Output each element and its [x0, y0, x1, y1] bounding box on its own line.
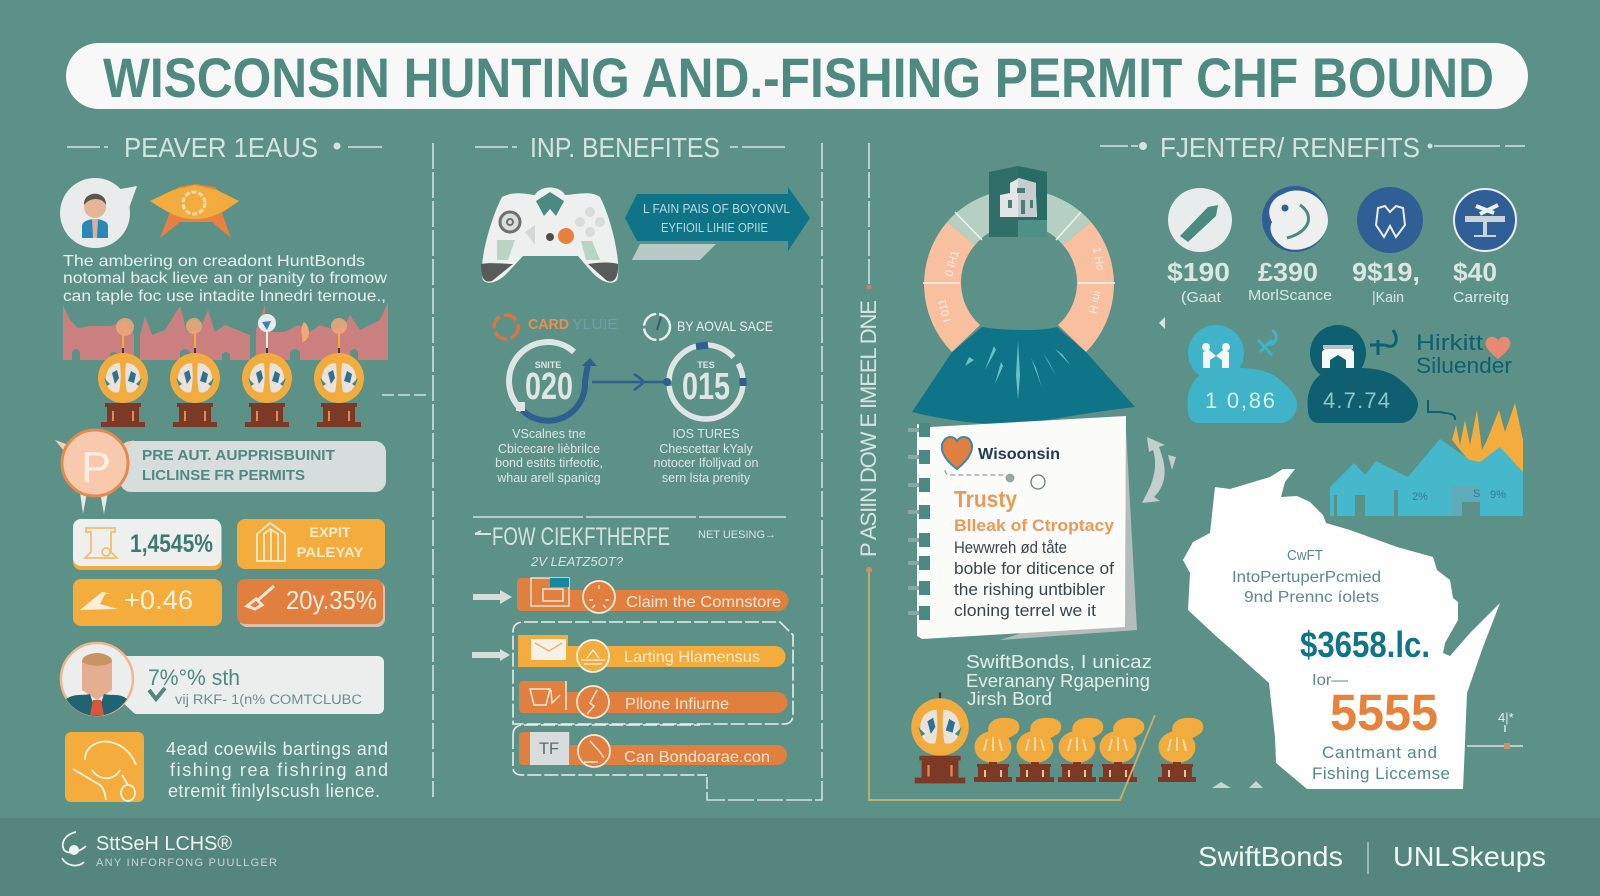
benefit: 9$19: [1352, 187, 1423, 306]
donut chart with mountain: [912, 189, 1135, 425]
heading: how to: FOW CIEKFTHERFE: [492, 523, 670, 551]
map: Wisconsin: 9nd Prennc íolets: [1244, 589, 1379, 606]
arrow: gauge link: [592, 374, 665, 390]
step: larting: [518, 635, 786, 672]
map: Wisconsin: IntoPertuperPcmied: [1232, 569, 1381, 586]
arrow: step one: [473, 590, 512, 604]
small scale marker: 4|*: [1498, 710, 1514, 725]
footer brands: SwiftBonds: [1198, 841, 1343, 872]
stat card: +0.46: [73, 579, 222, 626]
heading: how to: NET UESING→: [698, 529, 776, 541]
benefit: 9$19: 9$19,: [1352, 257, 1420, 287]
notepad card: Hewwreh ød tåte: [954, 538, 1067, 557]
stat card: expit paleyay: [237, 519, 385, 569]
heading: left column: PEAVER 1EAUS: [124, 132, 318, 163]
arrow: step two: [472, 649, 510, 661]
step: plione: [519, 681, 788, 718]
text block: swiftbonds note: [966, 652, 1152, 709]
column dividers: [433, 143, 869, 800]
label: card value: [494, 315, 618, 339]
stat card: expit paleyay: PALEYAY: [296, 544, 364, 560]
label: hirkitt siluender: [1416, 330, 1512, 420]
map: Wisconsin: Fishing Liccemse: [1312, 764, 1450, 783]
stat card: +0.46: +0.46: [124, 585, 193, 615]
benefit: $190: [1167, 188, 1232, 306]
label: hirkitt siluender: Siluender: [1416, 353, 1512, 378]
stat blob: dark: [1308, 325, 1418, 423]
label: card value: YLUIE: [572, 316, 618, 333]
text block: swiftbonds note: Everanany Rgapening: [966, 671, 1150, 691]
benefit: $40: Carreitg: [1453, 290, 1509, 306]
text block: gauge 020: bond estits tirfeotic,: [495, 456, 603, 470]
footer logo: ANY INFORFONG PUULLGER: [96, 857, 277, 869]
arrow banner: EYFIOIL LIHIE OPIIE: [661, 220, 768, 235]
connector: [382, 394, 430, 396]
small ground marks: [1212, 781, 1263, 788]
stat card: expit paleyay: EXPIT: [310, 524, 351, 540]
map: Wisconsin: Cantmant and: [1322, 743, 1437, 762]
callout: person with stat: vij RKF- 1(n% COMTCLUBC: [175, 692, 362, 707]
map: Wisconsin: [1183, 469, 1500, 789]
notepad card: Trusty: [954, 486, 1017, 512]
map: Wisconsin: 5555: [1330, 684, 1438, 741]
text block: left note: 4ead coewils bartings and: [166, 739, 388, 759]
heading: left column: [67, 132, 382, 163]
map: Wisconsin: Ior—: [1312, 672, 1348, 689]
gauge: 015: [663, 345, 743, 419]
text block: swiftbonds note: SwiftBonds, I unicaz: [966, 652, 1152, 672]
stat card: 1,4545%: 1,4545%: [130, 530, 213, 558]
step: plione: Pllone Infiurne: [625, 696, 729, 713]
donut chart with mountain: 0 IH1: [943, 249, 962, 278]
benefit: 9$19: |Kain: [1372, 290, 1404, 306]
notepad card: the rishing untbibler: [954, 580, 1105, 599]
footer brands: UNLSkeups: [1393, 841, 1546, 872]
text block: gauge 015: notocer Ifolljvad on: [654, 456, 759, 470]
heading: middle column: INP. BENEFITES: [530, 132, 720, 163]
callout: license permits: LICLINSE FR PERMITS: [142, 468, 305, 484]
stat card: 1,4545%: [73, 519, 222, 570]
callout: person with stat: 7%°% sth: [148, 665, 240, 690]
gold timeline line: [866, 567, 1155, 800]
footer brands: [1198, 841, 1546, 874]
icon: rotate arrows: [1142, 437, 1176, 503]
step: claim: [517, 578, 788, 613]
map: Wisconsin: CwFT: [1287, 547, 1323, 564]
step: claim: Claim the Comnstore: [626, 594, 781, 611]
gauge: 015: 015: [682, 366, 730, 408]
small marker: [1159, 317, 1165, 329]
callout: license permits: P: [81, 443, 111, 492]
illustration: town skyline: [1330, 403, 1523, 516]
icon: orange animal square: [65, 732, 144, 802]
stat blob: dark: 4.7.74: [1323, 388, 1390, 413]
text block: swiftbonds note: Jirsh Bord: [967, 689, 1052, 709]
step: can bond: TF: [539, 739, 559, 758]
callout: license permits: PRE AUT. AUPPRISBUINIT: [142, 448, 335, 464]
benefit: £390: £390: [1258, 257, 1318, 287]
label: card value: CARD: [528, 316, 569, 333]
icon: person speech bubble: [60, 178, 137, 248]
heading: right column: [1100, 132, 1525, 163]
notepad card: [908, 416, 1137, 640]
gauge: 020: [509, 342, 597, 421]
label: by annual sace: BY AOVAL SACE: [677, 318, 773, 334]
text block: intro: notomal back lieve an or panity to fromow: [63, 270, 387, 287]
benefit: $40: [1453, 189, 1516, 306]
illustration: town skyline: 2%: [1412, 491, 1428, 503]
footer logo: [62, 832, 277, 869]
arrow banner: [625, 187, 810, 260]
dashed step frames: [513, 622, 793, 775]
map: Wisconsin: $3658.lc.: [1300, 624, 1430, 665]
label: by annual sace: [644, 314, 773, 340]
stat card: 20y.35%: [237, 579, 385, 627]
donut chart with mountain: ını H: [1086, 289, 1104, 315]
icon: orange badge: [150, 184, 239, 238]
heading: right column: FJENTER/ RENEFITS: [1160, 132, 1420, 163]
gauge: 020: SNITE: [535, 360, 561, 370]
step: can bond: [519, 732, 787, 767]
benefit: $190: (Gaat: [1181, 290, 1221, 306]
text block: left note: etremit finlyIscush lience.: [168, 781, 380, 801]
illustration: town skyline: 9%: [1490, 489, 1506, 501]
vertical label: P ASIIN DOW E IMEEL DNE: [856, 300, 881, 557]
text block: gauge 020: VScalnes tne: [512, 427, 586, 441]
stat card: 20y.35%: 20y.35%: [286, 585, 377, 615]
text block: left note: fishing rea fishring and: [170, 760, 388, 780]
icon: game controller: [481, 188, 618, 283]
benefit: £390: [1248, 186, 1332, 304]
text block: gauge 015: Chescettar kYaly: [659, 442, 754, 456]
arrow banner: L FAIN PAIS OF BOYONVL: [643, 201, 790, 216]
callout: person with stat: [61, 643, 384, 716]
benefit: $190: $190: [1167, 257, 1230, 287]
icon: house badge: [989, 166, 1047, 237]
notepad card: cloning terrel we it: [954, 601, 1096, 620]
text block: gauge 020: Cbicecare lièbrilce: [498, 442, 600, 456]
text block: gauge 020: [495, 427, 603, 485]
benefit: $40: $40: [1453, 257, 1497, 287]
text block: intro: [63, 253, 387, 305]
text block: intro: The ambering on creadont HuntBonds: [63, 253, 365, 270]
lamp row: [98, 348, 364, 427]
step: can bond: Can Bondoarae.con: [624, 749, 770, 766]
donut chart with mountain: 1 Ho: [1090, 246, 1106, 271]
footer logo: SttSeH LCHS®: [96, 833, 232, 855]
text block: left note: [166, 739, 388, 801]
gauge: 020: 020: [525, 366, 573, 408]
callout: license permits: [55, 430, 386, 514]
benefit: £390: MorlScance: [1248, 288, 1332, 304]
illustration: pink skyline: [63, 302, 388, 360]
text block: gauge 020: whau arell spanicg: [496, 471, 601, 485]
notepad card: Wisoonsin: [978, 446, 1060, 463]
illustration: town skyline: S: [1473, 488, 1480, 500]
donut chart with mountain: I 011: [936, 297, 954, 323]
step: larting: Larting Hlamensus: [624, 649, 760, 666]
gauge: 015: TES: [697, 360, 715, 370]
label: hirkitt siluender: Hirkitt: [1416, 330, 1483, 355]
lamp row: large and small: [911, 692, 1203, 783]
heading: how to: 2V LEATZ5OT?: [530, 554, 624, 569]
stat blob: light: 1 0,86: [1205, 388, 1275, 413]
small scale marker: [1467, 710, 1523, 749]
text block: gauge 015: sern lsta prenity: [662, 471, 751, 485]
text block: intro: can taple foc use intadite Innedri ternoue.,: [63, 288, 386, 305]
notepad card: boble for diticence of: [954, 559, 1114, 578]
text block: gauge 015: [654, 427, 759, 485]
stat blob: light: [1188, 325, 1297, 423]
notepad card: Blleak of Ctroptacy: [954, 516, 1115, 535]
heading: how to: [473, 517, 786, 569]
text block: gauge 015: IOS TURES: [672, 427, 740, 441]
